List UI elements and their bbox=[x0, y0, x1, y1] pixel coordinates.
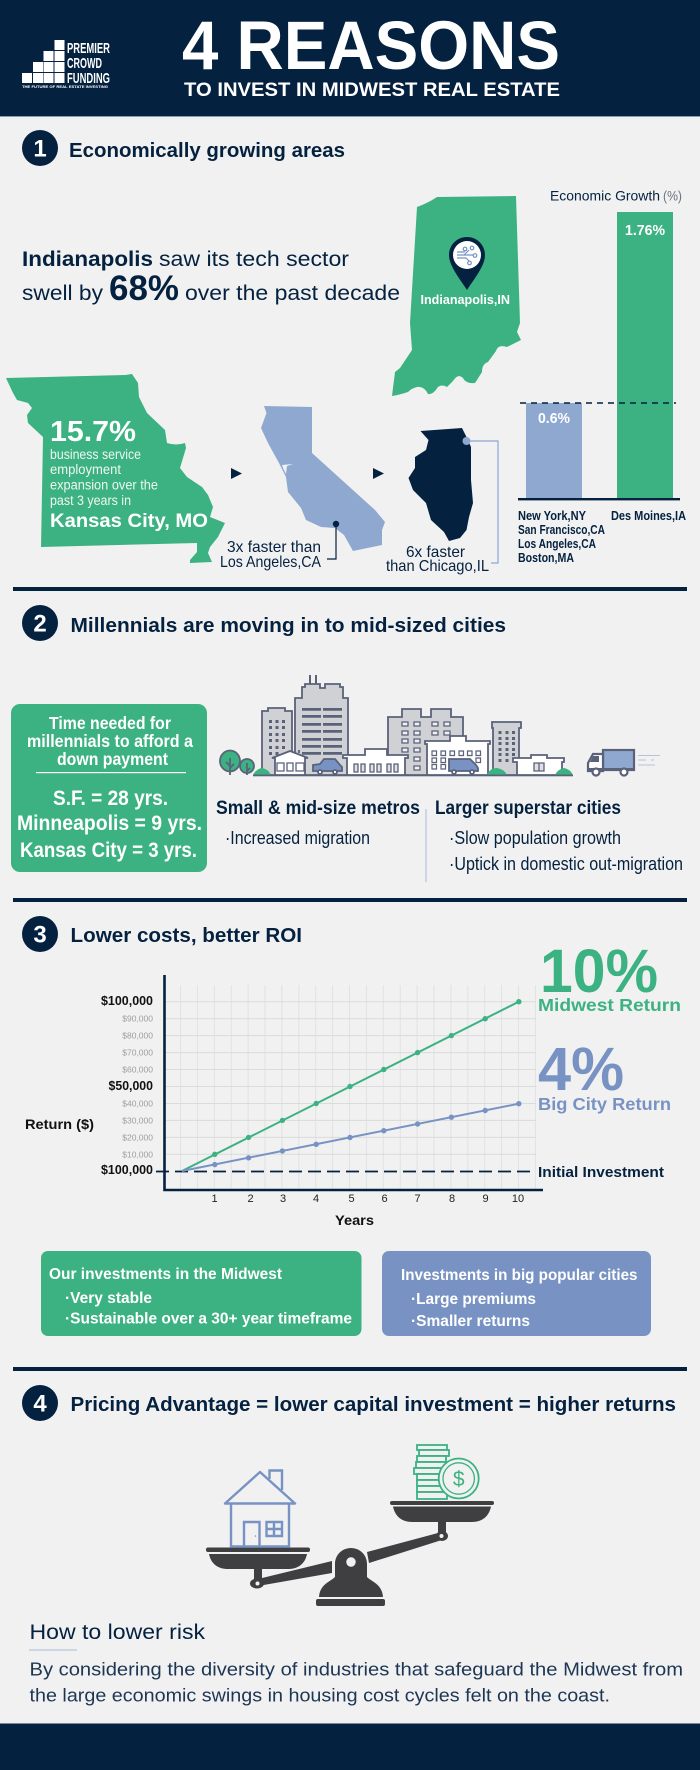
map: Missouri: Kansas City, MO bbox=[50, 510, 208, 532]
bar chart: economic growth: Boston,MA bbox=[518, 551, 574, 565]
bar chart: economic growth: Des Moines,IA bbox=[611, 509, 686, 523]
panel: time to afford down payment: millennials to afford a bbox=[27, 731, 193, 751]
panel: time to afford down payment: Minneapolis = 9 yrs. bbox=[17, 812, 202, 835]
y axis labels: $30,000 bbox=[122, 1116, 153, 1126]
icon: scale bbox=[206, 1501, 494, 1606]
callout: big city return: 4% bbox=[538, 1035, 624, 1103]
x axis labels: 5 bbox=[348, 1193, 355, 1205]
panel: time to afford down payment: down payment bbox=[57, 749, 168, 769]
panel: midwest investments bbox=[41, 1251, 362, 1336]
panel: time to afford down payment: Kansas City = 3 yrs. bbox=[20, 839, 197, 862]
section 4 heading bbox=[22, 1385, 676, 1421]
map: California: 3x faster than bbox=[227, 539, 321, 556]
bar chart: economic growth: 1.76% bbox=[625, 222, 665, 239]
x axis labels: 9 bbox=[482, 1193, 489, 1205]
section 1 heading: Economically growing areas bbox=[69, 140, 345, 162]
icon: shop building bbox=[343, 749, 408, 775]
y axis labels bbox=[101, 994, 153, 1177]
map: Missouri: past 3 years in bbox=[50, 493, 131, 508]
section 1 heading bbox=[22, 130, 345, 166]
y axis labels: $80,000 bbox=[122, 1030, 153, 1040]
series: big city return bbox=[182, 1101, 522, 1171]
logo: FUNDING bbox=[67, 70, 110, 87]
text: how to lower risk: How to lower risk bbox=[30, 1621, 206, 1644]
line chart: returns bbox=[25, 975, 543, 1228]
icon: house bbox=[225, 1470, 295, 1546]
icon: apartment building bbox=[425, 736, 490, 775]
map: California bbox=[220, 406, 385, 571]
column: small and mid-size metros: Small & mid-size metros bbox=[216, 798, 420, 819]
column: larger superstar cities: ·Slow population growth bbox=[449, 828, 621, 848]
panel: time to afford down payment: S.F. = 28 yrs. bbox=[53, 787, 168, 810]
map: Missouri bbox=[6, 374, 225, 563]
panel: midwest investments: ·Very stable bbox=[65, 1290, 152, 1307]
section 4 heading: Pricing Advantage = lower capital investment = higher returns bbox=[70, 1394, 676, 1416]
text: Indianapolis tech sector: saw its tech sector bbox=[159, 248, 349, 271]
icon: moving truck bbox=[588, 750, 660, 776]
x axis labels: 6 bbox=[381, 1193, 388, 1205]
map: Illinois bbox=[386, 428, 498, 575]
callout: big city return: Big City Return bbox=[538, 1094, 671, 1114]
map: Indiana: Indianapolis,IN bbox=[420, 292, 510, 307]
section 2 heading: Millennials are moving in to mid-sized cities bbox=[70, 615, 506, 637]
icon: house bbox=[272, 750, 308, 775]
icon: coin stack: $ bbox=[453, 1468, 465, 1491]
x axis labels: 7 bbox=[414, 1193, 421, 1205]
text: Indianapolis tech sector: 68% bbox=[109, 269, 179, 308]
label: initial investment: Initial Investment bbox=[538, 1165, 664, 1181]
line chart: returns: Return ($) bbox=[25, 1116, 94, 1132]
column: small and mid-size metros: ·Increased migration bbox=[225, 828, 370, 848]
bar chart: economic growth: 0.6% bbox=[538, 410, 570, 427]
column: larger superstar cities bbox=[435, 798, 683, 874]
section 3 heading: 3 bbox=[33, 922, 47, 948]
map: Missouri: business service bbox=[50, 447, 141, 462]
section 3 heading: Lower costs, better ROI bbox=[70, 925, 302, 947]
icon: van bbox=[449, 759, 478, 774]
y axis labels: $70,000 bbox=[122, 1048, 153, 1058]
icon: small building bbox=[513, 755, 564, 775]
icon: trees bbox=[220, 750, 254, 775]
y axis labels: $10,000 bbox=[122, 1150, 153, 1160]
section 1 heading: 1 bbox=[33, 136, 47, 162]
bar chart: economic growth: San Francisco,CA bbox=[518, 523, 605, 537]
icon: location pin bbox=[449, 237, 485, 290]
icon: mid building bbox=[388, 709, 463, 775]
bar chart: economic growth: (%) bbox=[663, 188, 682, 204]
subtitle: TO INVEST IN MIDWEST REAL ESTATE bbox=[184, 79, 560, 101]
map: Illinois: than Chicago,IL bbox=[386, 558, 489, 575]
bar chart: economic growth: Economic Growth bbox=[550, 188, 660, 204]
text: Indianapolis tech sector: Indianapolis bbox=[22, 248, 153, 271]
logo bbox=[22, 40, 110, 89]
text: how to lower risk bbox=[29, 1621, 683, 1706]
y axis labels: $40,000 bbox=[122, 1098, 153, 1108]
panel: time to afford down payment bbox=[11, 704, 207, 872]
icon: left tower bbox=[262, 708, 292, 775]
panel: big city investments bbox=[382, 1251, 651, 1336]
logo: CROWD bbox=[67, 55, 102, 72]
panel: midwest investments: Our investments in the Midwest bbox=[49, 1266, 283, 1283]
text: how to lower risk: By considering the diversity of industries that safeguard the Midwest from bbox=[30, 1660, 683, 1680]
map: Indiana bbox=[392, 196, 521, 396]
illustration: balance scale bbox=[206, 1445, 494, 1606]
x axis labels: 10 bbox=[512, 1193, 524, 1205]
x axis labels: 8 bbox=[449, 1193, 455, 1205]
text: Indianapolis tech sector: swell by bbox=[22, 282, 104, 305]
bar chart: economic growth bbox=[518, 188, 686, 565]
icon: right building bbox=[492, 722, 521, 775]
x axis labels: 2 bbox=[247, 1193, 254, 1205]
arrow bbox=[373, 468, 384, 479]
y axis labels: $20,000 bbox=[122, 1132, 153, 1142]
text: Indianapolis tech sector: over the past decade bbox=[185, 282, 400, 305]
icon: car bbox=[313, 759, 342, 774]
x axis labels: 4 bbox=[313, 1193, 319, 1205]
y axis labels: $90,000 bbox=[122, 1014, 153, 1024]
y axis labels: $100,000 bbox=[101, 994, 153, 1008]
callout: midwest return: Midwest Return bbox=[538, 995, 681, 1015]
map: Missouri: expansion over the bbox=[50, 478, 158, 492]
map: Missouri: employment bbox=[50, 462, 121, 477]
section 4 heading: 4 bbox=[33, 1390, 47, 1418]
x axis labels: 1 bbox=[211, 1193, 218, 1205]
panel: time to afford down payment: Time needed for bbox=[49, 713, 171, 733]
panel: big city investments: Investments in big popular cities bbox=[401, 1267, 638, 1284]
y axis labels: $100,000 bbox=[101, 1163, 153, 1177]
arrow bbox=[231, 468, 242, 479]
section 3 heading bbox=[22, 916, 302, 952]
logo: THE FUTURE OF REAL ESTATE INVESTING bbox=[22, 84, 108, 89]
icon: main tower bbox=[295, 675, 348, 775]
map: Illinois: 6x faster bbox=[406, 544, 466, 561]
column: larger superstar cities: Larger superstar cities bbox=[435, 798, 621, 819]
icon: coin stack bbox=[414, 1445, 479, 1499]
logo: PREMIER bbox=[67, 40, 110, 57]
panel: midwest investments: ·Sustainable over a 30+ year timeframe bbox=[65, 1310, 352, 1328]
line chart: returns: Years bbox=[335, 1212, 374, 1228]
x axis labels bbox=[211, 1193, 524, 1205]
panel: big city investments: ·Smaller returns bbox=[411, 1313, 530, 1330]
text: Indianapolis tech sector bbox=[22, 248, 400, 308]
series: midwest return bbox=[182, 999, 522, 1171]
x axis labels: 3 bbox=[280, 1193, 286, 1205]
y axis labels: $60,000 bbox=[122, 1064, 153, 1074]
bar chart: economic growth: New York,NY bbox=[518, 509, 587, 523]
map: California: Los Angeles,CA bbox=[220, 554, 321, 571]
text: how to lower risk: the large economic swings in housing cost cycles felt on the coast. bbox=[30, 1686, 610, 1706]
column: small and mid-size metros bbox=[216, 798, 420, 848]
bar chart: economic growth: Los Angeles,CA bbox=[518, 537, 596, 551]
header banner bbox=[0, 0, 700, 117]
illustration: city skyline bbox=[220, 675, 660, 776]
footer bar bbox=[0, 1724, 700, 1770]
section 2 heading: 2 bbox=[33, 610, 47, 638]
panel: big city investments: ·Large premiums bbox=[411, 1291, 536, 1308]
section 2 heading bbox=[22, 605, 506, 641]
title: 4 REASONS bbox=[182, 7, 560, 84]
callout: big city return bbox=[538, 1035, 671, 1114]
bushes bbox=[253, 768, 573, 775]
map: Missouri: 15.7% bbox=[50, 416, 136, 448]
callout: midwest return: 10% bbox=[540, 937, 658, 1005]
y axis labels: $50,000 bbox=[108, 1079, 153, 1093]
